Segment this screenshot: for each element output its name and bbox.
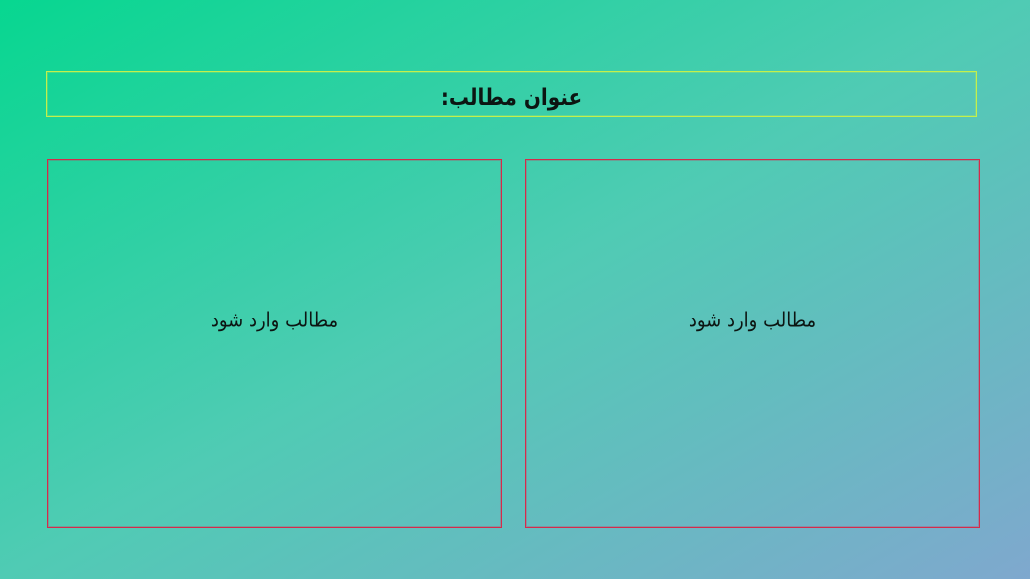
panel: left content xyxy=(47,159,502,528)
panel: right content xyxy=(525,159,980,528)
panel: right content: مطالب وارد شود xyxy=(689,309,816,332)
title xyxy=(46,71,977,117)
title: عنوان مطالب: xyxy=(441,83,582,111)
panel: left content: مطالب وارد شود xyxy=(211,309,338,332)
